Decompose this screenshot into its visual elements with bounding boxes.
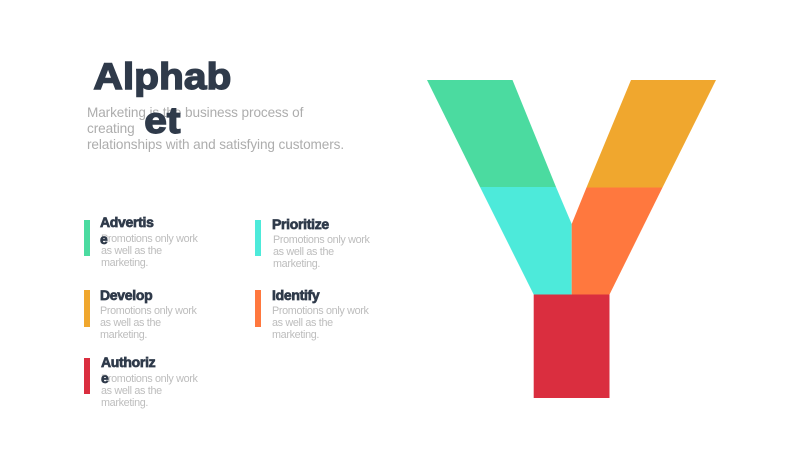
Y segment: teal lower left arm xyxy=(480,187,572,294)
description: Promotions only work as well as the marketing. xyxy=(272,305,369,341)
Y segment: green upper left arm xyxy=(427,80,556,187)
description: Promotions only work as well as the marketing. xyxy=(101,373,198,409)
heading: Identify: Identify xyxy=(272,287,319,303)
teal bar xyxy=(255,220,261,256)
description: Promotions only work as well as the marketing. xyxy=(273,234,370,270)
legend item: Identify xyxy=(255,287,369,341)
title: Alphab et xyxy=(93,56,231,141)
description: Promotions only work as well as the marketing. xyxy=(100,305,197,341)
amber bar xyxy=(84,290,90,327)
legend item: Prioritize xyxy=(255,216,370,270)
legend item: Authorize xyxy=(84,354,198,409)
legend item: Develop xyxy=(84,287,197,341)
Y segment: red stem xyxy=(534,294,610,398)
description: Promotions only work as well as the marketing. xyxy=(101,233,198,269)
heading: Advertise: Advertis e xyxy=(100,214,154,247)
green bar xyxy=(84,220,90,256)
heading: Develop: Develop xyxy=(100,287,152,303)
Y segment: amber upper right arm xyxy=(586,80,716,188)
heading: Prioritize: Prioritize xyxy=(272,216,329,232)
orange bar xyxy=(255,290,261,327)
Y segment: orange lower right arm xyxy=(572,188,662,294)
intro text: Marketing is the business process of creating relationships with and satisfying customers. xyxy=(87,105,344,152)
legend item: Advertise xyxy=(84,214,198,269)
heading: Authorize: Authoriz e xyxy=(101,354,155,386)
red bar xyxy=(84,358,90,394)
